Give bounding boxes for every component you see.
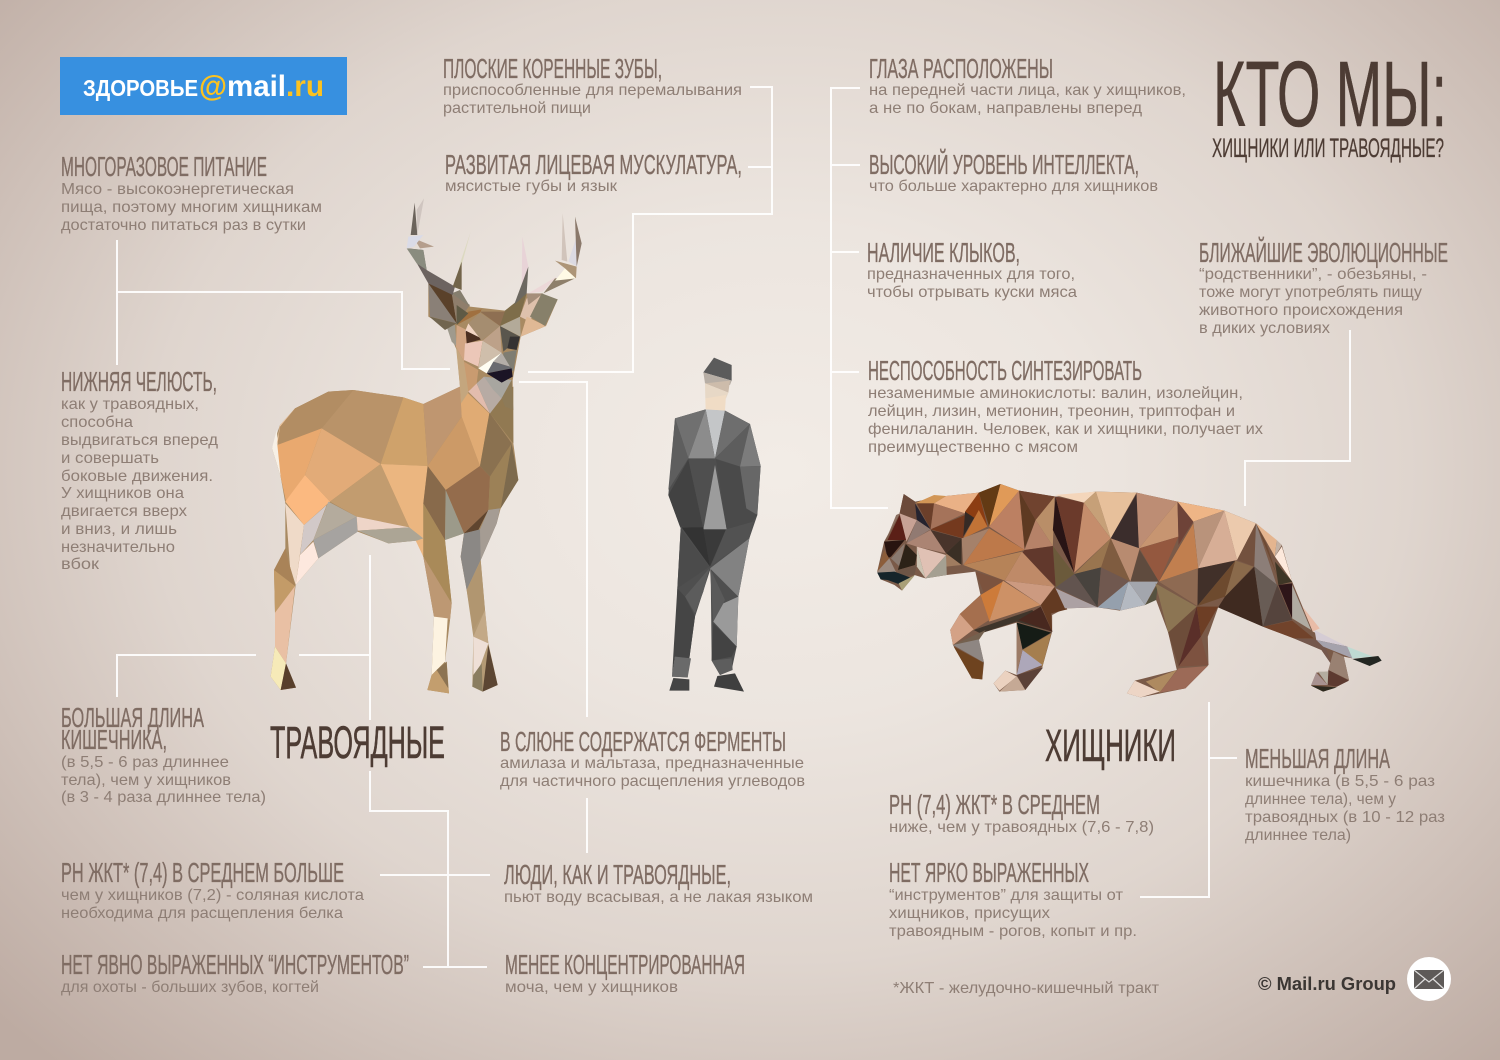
illustration: tiger [877, 484, 1382, 697]
text: нижняя челюсть: как у травоядных, [61, 396, 199, 413]
text: нет явно выраженных инструментов: НЕТ ЯВНО ВЫРАЖЕННЫХ “ИНСТРУМЕНТОВ” [61, 949, 409, 980]
text: нижняя челюсть: выдвигаться вперед [61, 432, 219, 449]
text: плоские коренные зубы: приспособленные для перемалывания [443, 82, 742, 99]
text: нет ярко выраженных: травоядным - рогов, копыт и пр. [889, 923, 1137, 940]
text: в слюне содержатся ферменты [500, 726, 805, 790]
text: ph жкт больше: необходима для расщепления белка [61, 905, 343, 922]
footnote: *ЖКТ - желудочно-кишечный тракт [893, 980, 1160, 997]
text: менее концентрированная [505, 949, 745, 996]
text: неспособность синтезировать: фенилаланин. Человек, как и хищники, получает их [868, 421, 1263, 438]
text: нижняя челюсть: У хищников она [61, 485, 184, 502]
illustration: man [668, 358, 761, 692]
text: нет ярко выраженных: хищников, присущих [889, 905, 1050, 922]
text: плоские коренные зубы [443, 53, 742, 117]
heading: травоядные: ТРАВОЯДНЫЕ [270, 717, 445, 768]
text: меньшая длина: длиннее тела) [1245, 827, 1351, 844]
text: неспособность синтезировать: НЕСПОСОБНОСТЬ СИНТЕЗИРОВАТЬ [868, 355, 1142, 386]
text: нет ярко выраженных [889, 857, 1137, 940]
text: большая длина кишечника [61, 702, 266, 806]
text: в слюне содержатся ферменты: амилаза и мальтаза, предназначенные [500, 755, 804, 772]
antlers [407, 198, 582, 305]
text: ближайшие эволюционные родственники: “родственники”, - обезьяны, - [1199, 266, 1427, 283]
text: ближайшие эволюционные родственники: животного происхождения [1199, 302, 1403, 319]
text: многоразовое питание [61, 151, 322, 234]
logo: Здоровье@mail.ru: @ [199, 70, 227, 103]
text: большая длина кишечника: (в 5,5 - 6 раз длиннее [61, 754, 229, 771]
text: неспособность синтезировать: лейцин, лизин, метионин, треонин, триптофан и [868, 403, 1235, 420]
text: высокий уровень интеллекта: что больше характерно для хищников [869, 178, 1158, 195]
text: ближайшие эволюционные родственники: тоже могут употреблять пищу [1199, 284, 1422, 301]
text: развитая лицевая мускулатура: РАЗВИТАЯ ЛИЦЕВАЯ МУСКУЛАТУРА, [445, 149, 742, 180]
text: нижняя челюсть: незначительно [61, 539, 175, 556]
text: многоразовое питание: достаточно питаться раз в сутки [61, 217, 306, 234]
text: высокий уровень интеллекта [869, 149, 1158, 195]
copyright: © Mail.ru Group [1258, 974, 1396, 994]
text: большая длина кишечника: КИШЕЧНИКА, [61, 724, 167, 755]
text: глаза расположены: ГЛАЗА РАСПОЛОЖЕНЫ [869, 53, 1053, 84]
icon: envelope [1407, 957, 1451, 1001]
text: люди, как и травоядные: пьют воду всасывая, а не лакая языком [504, 889, 813, 906]
text: нижняя челюсть: вбок [61, 556, 100, 573]
text: наличие клыков: предназначенных для того, [867, 266, 1075, 283]
text: глаза расположены [869, 53, 1186, 117]
text: большая длина кишечника: БОЛЬШАЯ ДЛИНА [61, 702, 204, 733]
text: меньшая длина [1245, 743, 1445, 844]
illustration: deer [271, 198, 582, 693]
text: люди, как и травоядные [504, 859, 813, 906]
text: развитая лицевая мускулатура [445, 149, 742, 195]
text: нет ярко выраженных: НЕТ ЯРКО ВЫРАЖЕННЫХ [889, 857, 1089, 888]
logo: Здоровье@mail.ru: ЗДОРОВЬЕ [83, 75, 198, 101]
text: многоразовое питание: Мясо - высокоэнергетическая [61, 181, 294, 198]
text: нижняя челюсть: НИЖНЯЯ ЧЕЛЮСТЬ, [61, 366, 217, 397]
text: в слюне содержатся ферменты: В СЛЮНЕ СОДЕРЖАТСЯ ФЕРМЕНТЫ [500, 726, 786, 757]
text: наличие клыков: НАЛИЧИЕ КЛЫКОВ, [867, 237, 1020, 268]
text: глаза расположены: на передней части лица, как у хищников, [869, 82, 1186, 99]
text: неспособность синтезировать [868, 355, 1263, 456]
text: развитая лицевая мускулатура: мясистые губы и язык [445, 178, 618, 195]
text: нижняя челюсть: боковые движения. [61, 468, 213, 485]
text: нижняя челюсть: и вниз, и лишь [61, 521, 177, 538]
text: высокий уровень интеллекта: ВЫСОКИЙ УРОВЕНЬ ИНТЕЛЛЕКТА, [869, 149, 1139, 180]
text: глаза расположены: а не по бокам, направлены вперед [869, 100, 1143, 117]
text: нижняя челюсть: двигается вверх [61, 503, 187, 520]
text: большая длина кишечника: (в 3 - 4 раза длиннее тела) [61, 789, 266, 806]
text: многоразовое питание: пища, поэтому многим хищникам [61, 199, 322, 216]
logo: Здоровье@mail.ru [60, 57, 347, 115]
text: нет явно выраженных инструментов [61, 949, 409, 996]
text: ph жкт ниже: ниже, чем у травоядных (7,6 - 7,8) [889, 819, 1154, 836]
text: ph жкт больше: PH ЖКТ* (7,4) В СРЕДНЕМ БОЛЬШЕ [61, 857, 344, 888]
text: менее концентрированная: моча, чем у хищников [505, 979, 678, 996]
text: ph жкт ниже: PH (7,4) ЖКТ* В СРЕДНЕМ [889, 789, 1100, 820]
text: люди, как и травоядные: ЛЮДИ, КАК И ТРАВОЯДНЫЕ, [504, 859, 731, 890]
text: наличие клыков [867, 237, 1077, 301]
text: ближайшие эволюционные родственники [1199, 237, 1448, 337]
logo: Здоровье@mail.ru: mail [227, 70, 286, 103]
text: наличие клыков: чтобы отрывать куски мяса [867, 284, 1077, 301]
text: меньшая длина: кишечника (в 5,5 - 6 раз [1245, 773, 1435, 790]
text: многоразовое питание: МНОГОРАЗОВОЕ ПИТАНИЕ [61, 151, 267, 182]
text: менее концентрированная: МЕНЕЕ КОНЦЕНТРИРОВАННАЯ [505, 949, 745, 980]
text: меньшая длина: МЕНЬШАЯ ДЛИНА [1245, 743, 1390, 774]
text: ph жкт больше [61, 857, 364, 922]
neck and head [428, 283, 558, 413]
text: в слюне содержатся ферменты: для частичного расщепления углеводов [500, 773, 805, 790]
text: неспособность синтезировать: незаменимые аминокислоты: валин, изолейцин, [868, 385, 1243, 402]
text: плоские коренные зубы: растительной пищи [443, 100, 591, 117]
text: нет ярко выраженных: “инструментов” для защиты от [889, 887, 1124, 904]
logo: Здоровье@mail.ru: .ru [286, 70, 324, 103]
text: нет явно выраженных инструментов: для охоты - больших зубов, когтей [61, 979, 319, 996]
text: меньшая длина: травоядных (в 10 - 12 раз [1245, 809, 1445, 826]
text: ближайшие эволюционные родственники: в диких условиях [1199, 320, 1330, 337]
text: нижняя челюсть [61, 366, 219, 573]
heading: хищники: ХИЩНИКИ [1045, 720, 1176, 771]
text: меньшая длина: длиннее тела), чем у [1245, 791, 1396, 808]
text: большая длина кишечника: тела), чем у хищников [61, 772, 231, 789]
text: нижняя челюсть: способна [61, 414, 133, 431]
text: неспособность синтезировать: преимущественно с мясом [868, 439, 1078, 456]
text: ph жкт ниже [889, 789, 1154, 836]
text: нижняя челюсть: и совершать [61, 450, 159, 467]
text: плоские коренные зубы: ПЛОСКИЕ КОРЕННЫЕ ЗУБЫ, [443, 53, 662, 84]
text: ph жкт больше: чем у хищников (7,2) - соляная кислота [61, 887, 364, 904]
